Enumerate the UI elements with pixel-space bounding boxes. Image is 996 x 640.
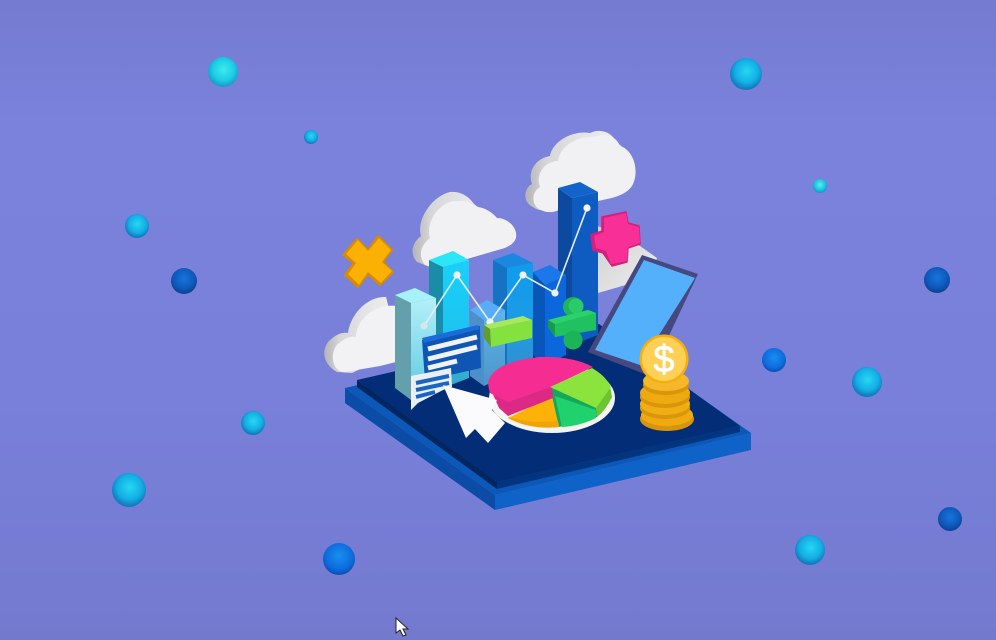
- cloud: back right: [525, 131, 636, 212]
- line chart with markers: [420, 204, 591, 330]
- slice: pink: [488, 357, 593, 416]
- cloud: middle left: [412, 192, 516, 267]
- bar: strong blue: [533, 265, 566, 365]
- bar: dark blue tall: [558, 182, 598, 345]
- bar: pale: [395, 288, 436, 400]
- bar chart: 3D bars: [395, 182, 598, 400]
- bar: cyan: [429, 251, 469, 388]
- coin stack: [640, 334, 694, 431]
- cloud: behind pink plus: [598, 226, 657, 293]
- bar: small light blue: [470, 300, 505, 386]
- platform base: [345, 324, 751, 510]
- arrow cursor: [443, 385, 505, 443]
- message panel: blue: [422, 325, 481, 381]
- divide sign: [548, 297, 596, 350]
- pink plus: [591, 212, 640, 266]
- slice: teal green: [550, 387, 597, 427]
- bar: medium blue: [493, 253, 533, 378]
- cloud: lower left: [324, 297, 400, 373]
- slice: orange: [508, 396, 559, 428]
- coin: dollar: $: [653, 339, 675, 381]
- floating spheres: [112, 57, 962, 575]
- tablet: [588, 255, 698, 376]
- yellow cross: [343, 236, 393, 287]
- pie chart: [488, 357, 615, 433]
- slice: lime: [550, 368, 612, 417]
- icon: mouse pointer: [396, 618, 408, 636]
- lime minus block: [484, 316, 532, 347]
- plate: [489, 363, 615, 433]
- platform top: [357, 324, 740, 482]
- message bubble: white: [411, 368, 452, 410]
